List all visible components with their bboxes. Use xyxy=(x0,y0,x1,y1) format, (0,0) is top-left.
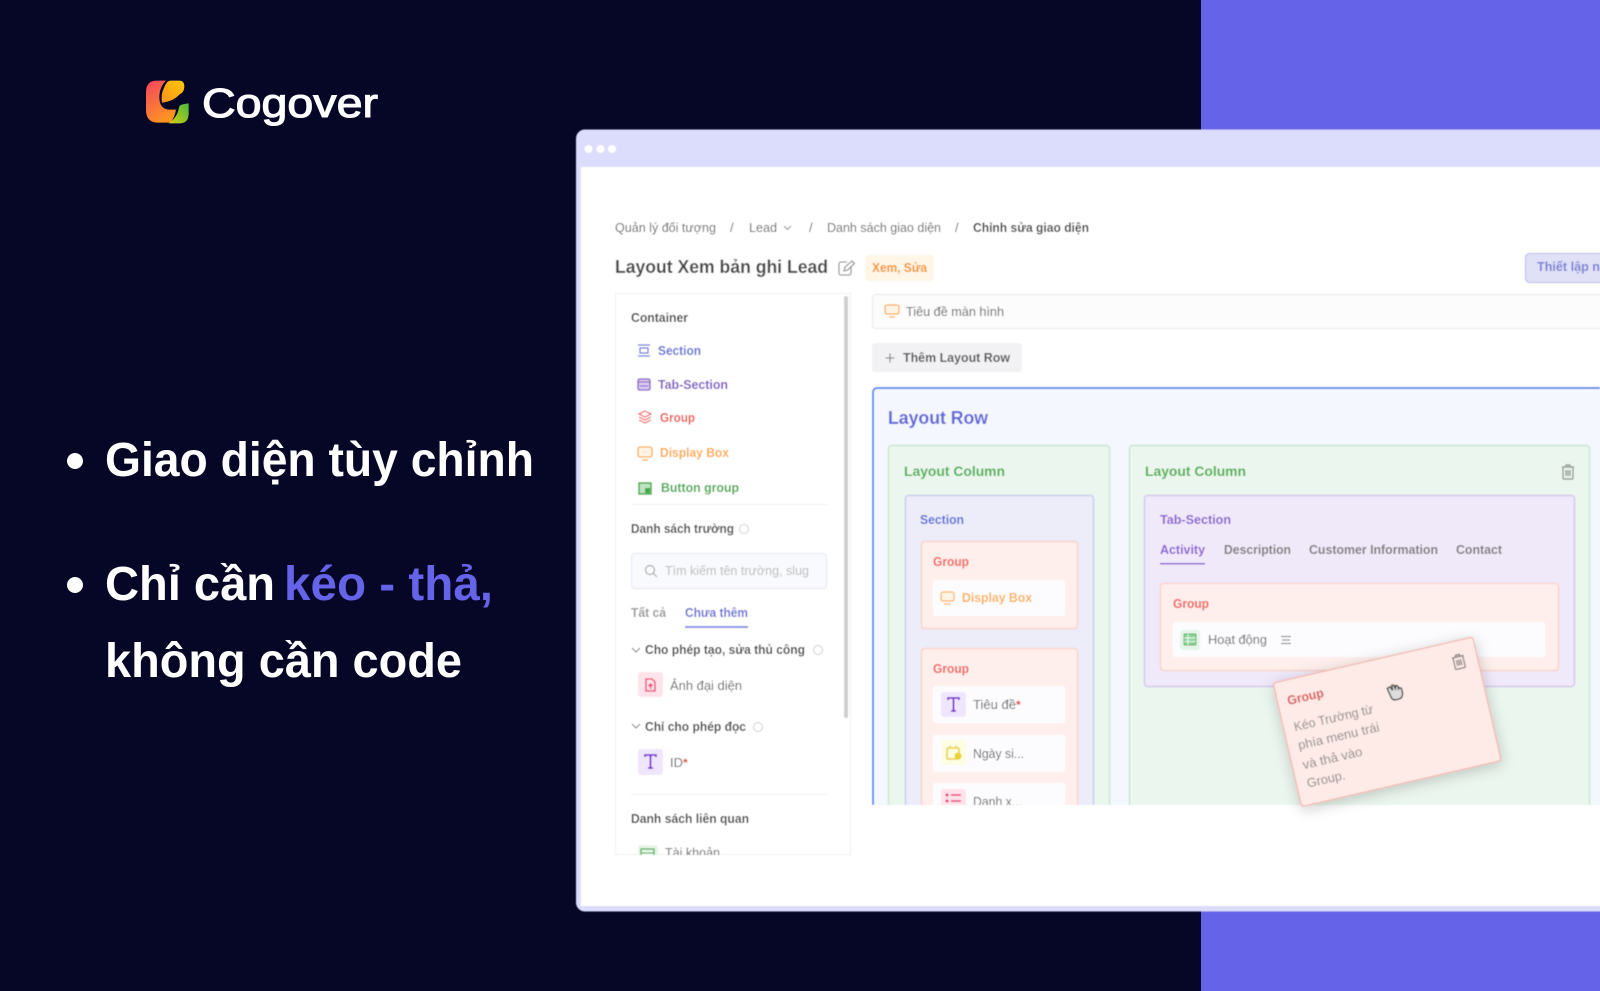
item: Section: Section xyxy=(658,343,701,358)
group: Chỉ cho phép đọc: * xyxy=(683,756,688,770)
scrollbar xyxy=(844,296,848,718)
logo: Cogover xyxy=(146,80,378,126)
logo wordmark: Cogover xyxy=(202,80,378,126)
panel: Group Hoạt động: Group xyxy=(1173,596,1209,611)
breadcrumb: Lead xyxy=(749,220,777,235)
floating card: Group xyxy=(1273,637,1501,807)
panel: Tab-Section: Tab-Section xyxy=(1160,512,1231,527)
field: Tiêu đề: * xyxy=(1016,698,1021,712)
bullet 1: Giao diện tùy chỉnh xyxy=(105,434,534,487)
tabs: Chưa thêm xyxy=(685,605,748,620)
group: Cho phép tạo, sửa thủ công: Ảnh đại diện xyxy=(670,678,742,693)
panel: Group with fields: Group xyxy=(933,661,969,676)
panel: Tab-Section xyxy=(1144,496,1574,686)
panel: Group with Display Box: Group xyxy=(933,554,969,569)
panel: Group with fields xyxy=(920,647,1079,806)
field: Ngày si...: Ngày si... xyxy=(973,746,1024,761)
icon: info xyxy=(740,524,748,534)
bullet 2: kéo - thả, xyxy=(284,558,493,611)
screen title bar xyxy=(872,294,1600,328)
item: Button group: Button group xyxy=(661,480,739,495)
item: Section xyxy=(638,343,701,358)
panel: left Layout Column xyxy=(887,444,1111,806)
panel: right Layout Column xyxy=(1130,446,1590,846)
item: Tab-Section: Tab-Section xyxy=(658,377,728,392)
group: Chỉ cho phép đọc: ID xyxy=(670,755,683,770)
icon: Cogover mark xyxy=(146,81,189,123)
tabs: Tất cả xyxy=(631,605,667,620)
panel: Section xyxy=(904,494,1094,806)
panel: Group with Display Box: Display Box xyxy=(962,590,1033,605)
heading: Danh sách liên quan: Danh sách liên quan xyxy=(631,811,749,826)
icon: trash xyxy=(1452,653,1466,670)
item: Tài khoản: Tài khoản xyxy=(665,845,720,860)
tab strip: Activity xyxy=(1160,542,1206,557)
icon: hand cursor xyxy=(1387,683,1404,701)
field: Tiêu đề xyxy=(933,686,1065,723)
icon: trash xyxy=(1562,465,1574,479)
panel: Layout Row xyxy=(871,386,1600,806)
screen title bar: Tiêu đề màn hình xyxy=(906,304,1004,319)
panel: Group Hoạt động xyxy=(1160,584,1558,670)
canvas xyxy=(871,386,1600,806)
panel: right Layout Column: Layout Column xyxy=(1145,463,1246,479)
item: Tài khoản xyxy=(638,845,720,856)
breadcrumb: Danh sách giao diện xyxy=(827,220,941,235)
field: Danh x... xyxy=(933,783,1065,806)
card heading: Group xyxy=(1286,685,1325,708)
button: Thêm Layout Row: Thêm Layout Row xyxy=(903,350,1011,365)
group: Cho phép tạo, sửa thủ công xyxy=(632,642,822,697)
panel: Section: Section xyxy=(920,512,964,527)
group: Chỉ cho phép đọc xyxy=(632,719,762,775)
badge: Xem, Sửa xyxy=(865,255,934,281)
breadcrumb: / xyxy=(955,220,959,235)
card description: phía menu trái xyxy=(1297,719,1381,753)
button: Thêm Layout Row xyxy=(872,343,1022,372)
icon: edit xyxy=(839,261,854,275)
tab strip: Customer Information xyxy=(1309,542,1438,557)
tab strip: Contact xyxy=(1456,542,1503,557)
search box xyxy=(632,554,826,588)
bullet 2 xyxy=(67,558,493,688)
panel: left Layout Column: Layout Column xyxy=(904,463,1005,479)
card description: và thả vào xyxy=(1301,744,1364,772)
card description: Kéo Trường từ xyxy=(1292,701,1375,734)
item: Group xyxy=(639,410,695,425)
page title: Layout Xem bản ghi Lead xyxy=(615,257,828,277)
badge: Xem, Sửa: Xem, Sửa xyxy=(872,260,928,275)
field: Tiêu đề: Tiêu đề xyxy=(973,697,1016,712)
heading: Layout Row: Layout Row xyxy=(888,408,989,428)
card description: Group. xyxy=(1305,767,1347,791)
field: Ngày si... xyxy=(933,735,1065,772)
card description xyxy=(1292,701,1390,791)
group: Cho phép tạo, sửa thủ công: Cho phép tạo, sửa thủ công xyxy=(645,642,805,657)
breadcrumb: Chỉnh sửa giao diện xyxy=(973,220,1089,235)
breadcrumb: / xyxy=(809,220,813,235)
button: Thiết lập xyxy=(1526,254,1600,282)
browser window xyxy=(576,130,1600,948)
breadcrumb: Quản lý đối tượng xyxy=(615,220,716,235)
breadcrumb xyxy=(615,220,1089,235)
heading: Danh sách trường: Danh sách trường xyxy=(631,521,734,536)
breadcrumb: / xyxy=(730,220,734,235)
group: Chỉ cho phép đọc: Chỉ cho phép đọc xyxy=(645,719,746,734)
tabs xyxy=(631,605,748,628)
bullet 2: Chỉ cần xyxy=(105,558,275,611)
tab strip xyxy=(1160,542,1503,564)
item: Group: Group xyxy=(660,410,695,425)
window controls xyxy=(584,145,616,153)
panel: Group Hoạt động: Hoạt động xyxy=(1208,632,1267,647)
item: Display Box: Display Box xyxy=(660,445,730,460)
search box: Tìm kiếm tên trường, slug xyxy=(665,563,809,578)
field: Danh x...: Danh x... xyxy=(973,794,1022,809)
panel: sidebar xyxy=(616,294,850,865)
bullet list xyxy=(67,434,534,688)
heading: Container: Container xyxy=(631,310,688,325)
bullet 2: không cần code xyxy=(105,635,462,688)
tab strip: Description xyxy=(1224,542,1291,557)
panel: Group with Display Box xyxy=(922,542,1078,628)
